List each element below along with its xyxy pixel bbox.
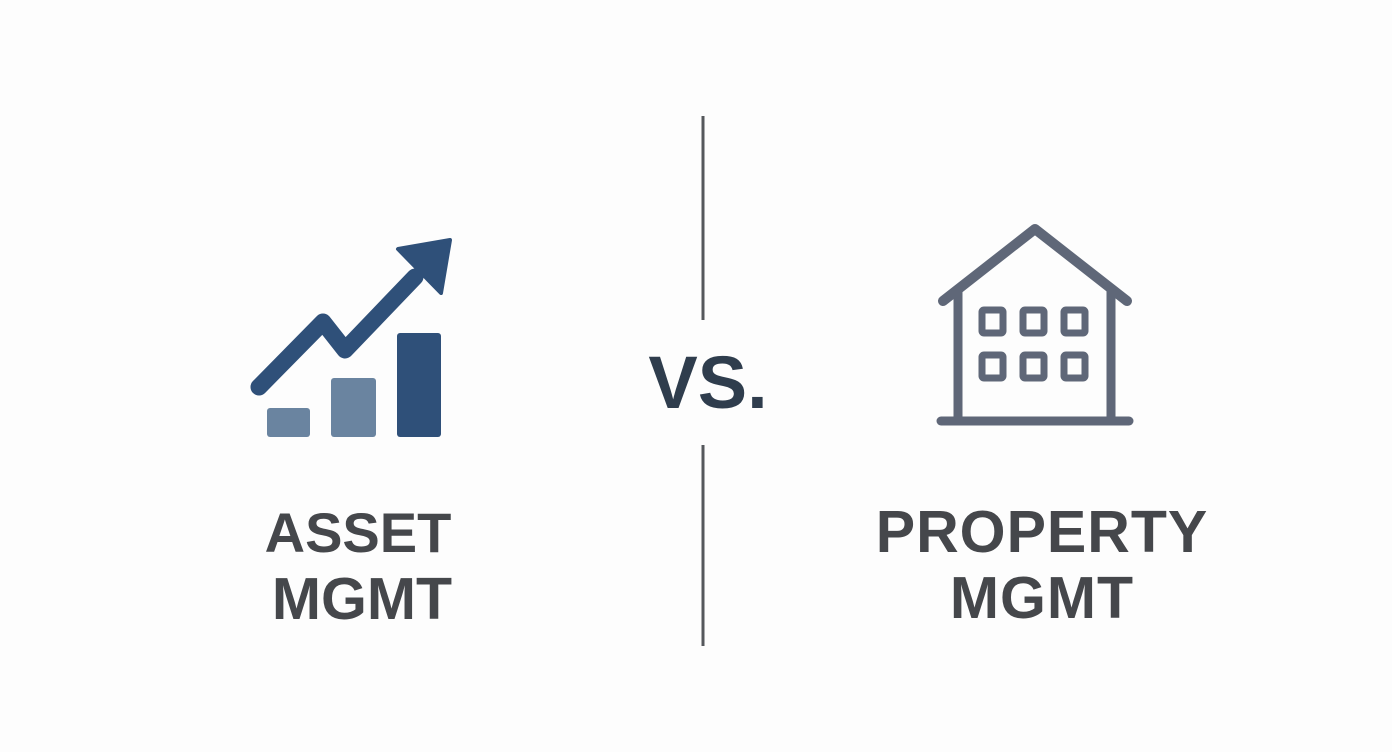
- icon: growth chart: [259, 240, 450, 437]
- vs label: VS.: [648, 341, 768, 424]
- label: property mgmt: PROPERTY: [876, 499, 1208, 565]
- label: property mgmt: MGMT: [950, 565, 1134, 631]
- label: asset mgmt: MGMT: [272, 566, 452, 632]
- label: property mgmt: [876, 499, 1208, 631]
- label: asset mgmt: ASSET: [265, 501, 451, 564]
- divider bottom: [702, 445, 704, 646]
- icon: building: [941, 229, 1129, 421]
- label: asset mgmt: [265, 501, 452, 632]
- divider top: [702, 116, 704, 320]
